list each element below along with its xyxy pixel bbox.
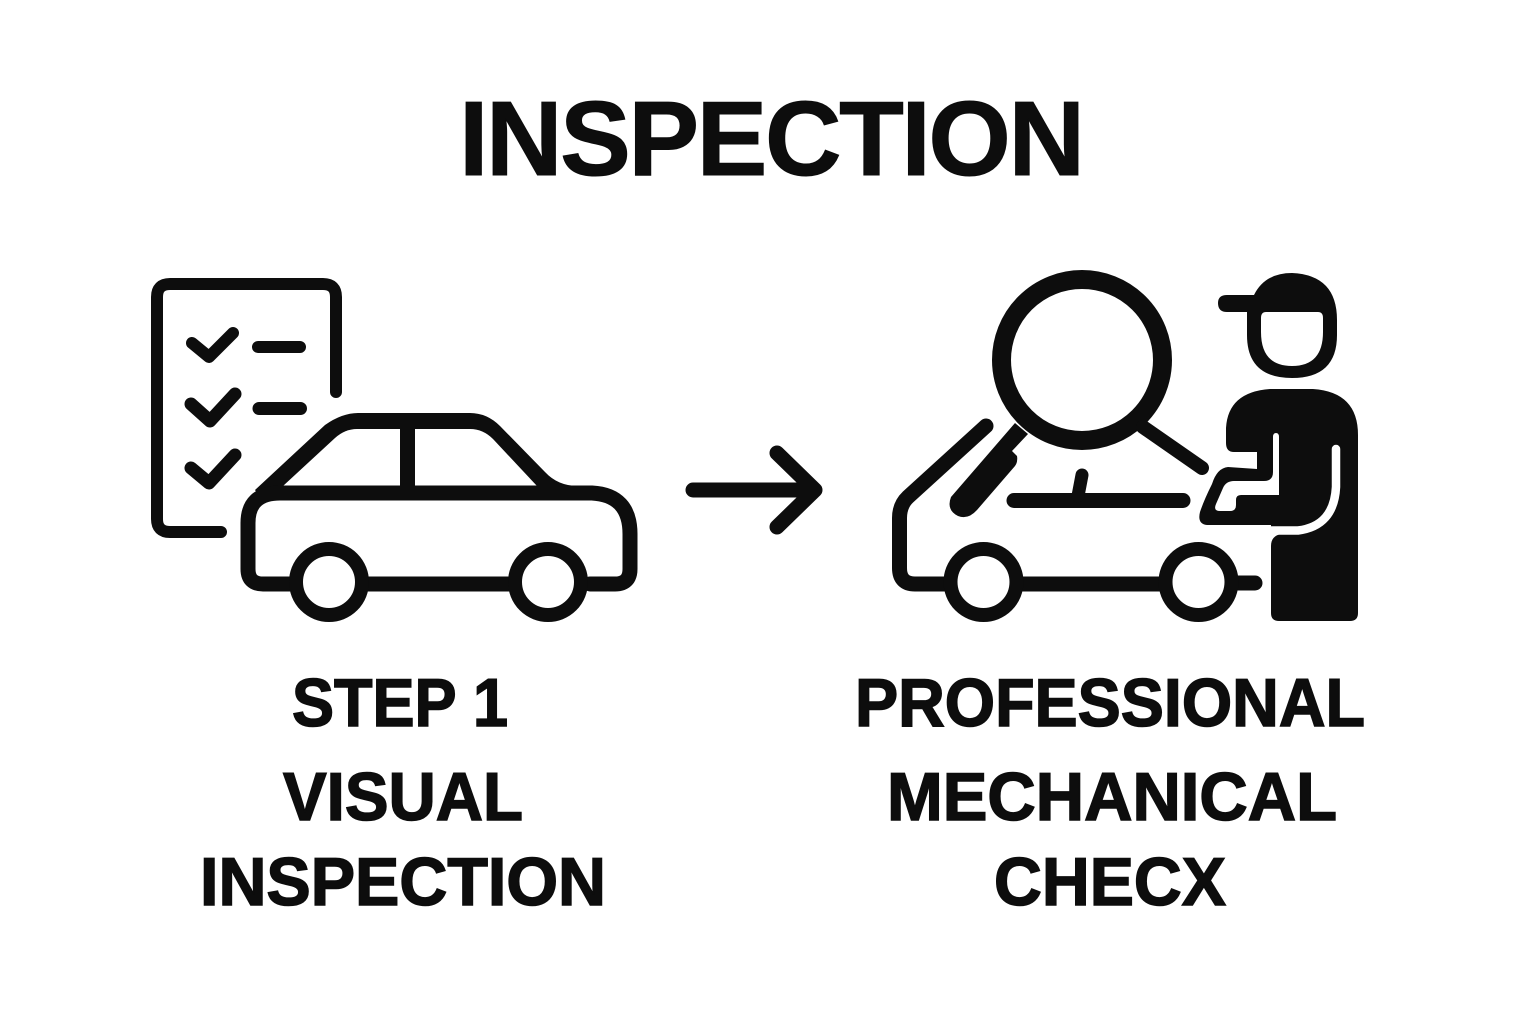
label: step 1 visual inspection: INSPECTION bbox=[200, 844, 606, 920]
label: professional mechanical check: MECHANICAL bbox=[887, 759, 1337, 835]
icon: checklist bbox=[157, 284, 336, 532]
icon: car with open hood bbox=[900, 426, 1255, 615]
label: step 1 visual inspection bbox=[200, 665, 606, 920]
label: step 1 visual inspection: VISUAL bbox=[283, 759, 523, 835]
title: INSPECTION bbox=[459, 80, 1085, 198]
label: professional mechanical check: CHECX bbox=[994, 844, 1226, 920]
arrow bbox=[693, 453, 815, 527]
icon: magnifying glass bbox=[950, 280, 1202, 517]
icon: car bbox=[248, 413, 630, 615]
label: professional mechanical check bbox=[855, 665, 1365, 920]
label: step 1 visual inspection: STEP 1 bbox=[292, 665, 508, 741]
label: professional mechanical check: PROFESSIONAL bbox=[855, 665, 1365, 741]
icon: mechanic bbox=[1199, 273, 1358, 621]
